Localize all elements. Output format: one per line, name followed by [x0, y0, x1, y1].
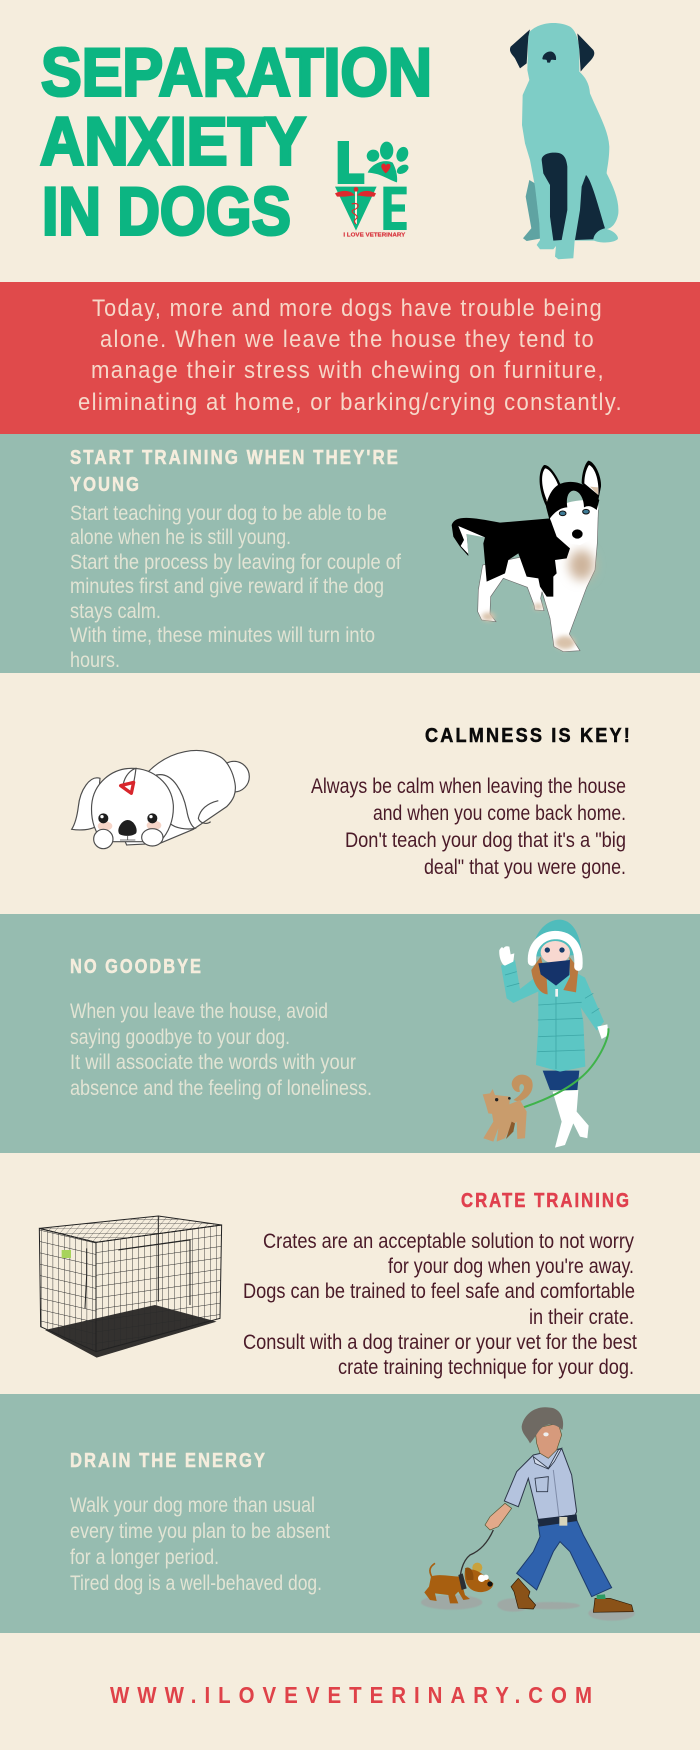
- title: SEPARATION: [41, 34, 432, 110]
- icon: man walking small dog: [421, 1407, 635, 1621]
- heading: crate training: CRATE TRAINING: [461, 1190, 631, 1212]
- icon: woman walking dog: [483, 920, 609, 1148]
- body text: calmness: Always be calm when leaving the house: [311, 775, 626, 798]
- body text: no goodbye: [70, 1000, 372, 1100]
- heading: start training: START TRAINING WHEN THEY'RE: [70, 447, 400, 469]
- body text: drain the energy: [70, 1494, 330, 1595]
- heading: drain the energy: DRAIN THE ENERGY: [70, 1450, 267, 1472]
- intro text: Today, more and more dogs have trouble being: [92, 295, 603, 322]
- heading: start training: [70, 447, 400, 496]
- body text: calmness: Don't teach your dog that it's a "big: [345, 829, 626, 852]
- title: [40, 34, 432, 250]
- intro text: alone. When we leave the house they tend to: [100, 326, 595, 353]
- panel: footer: [0, 1633, 700, 1750]
- logo caption: I LOVE VETERINARY: [343, 232, 406, 238]
- body text: calmness: deal" that you were gone.: [424, 856, 626, 879]
- intro text: manage their stress with chewing on furniture,: [91, 357, 605, 384]
- body text: drain the energy: for a longer period.: [70, 1546, 219, 1569]
- body text: crate training: Dogs can be trained to feel safe and comfortable: [243, 1280, 635, 1303]
- body text: start training: hours.: [70, 649, 120, 672]
- heading: start training: YOUNG: [70, 474, 141, 496]
- body text: drain the energy: Tired dog is a well-behaved dog.: [70, 1572, 322, 1595]
- body text: drain the energy: Walk your dog more than usual: [70, 1494, 315, 1517]
- body text: crate training: for your dog when you're away.: [388, 1255, 634, 1278]
- icon: husky puppy: [452, 461, 601, 652]
- panel: intro banner: [0, 282, 700, 434]
- body text: calmness: [311, 775, 626, 879]
- body text: start training: Start teaching your dog to be able to be: [70, 502, 387, 525]
- body text: calmness: and when you come back home.: [373, 802, 626, 825]
- body text: no goodbye: It will associate the words with your: [70, 1051, 356, 1074]
- body text: start training: With time, these minutes will turn into: [70, 624, 375, 647]
- website url: WWW.ILOVEVETERINARY.COM: [110, 1682, 600, 1708]
- icon: sleeping white dog: [72, 751, 249, 849]
- intro text: eliminating at home, or barking/crying constantly.: [78, 389, 623, 416]
- logo: I Love Veterinary: [335, 141, 410, 238]
- body text: no goodbye: When you leave the house, avoid: [70, 1000, 328, 1023]
- body text: no goodbye: saying goodbye to your dog.: [70, 1026, 290, 1049]
- panel: start training: [0, 434, 700, 673]
- intro text: [78, 295, 623, 416]
- body text: drain the energy: every time you plan to be absent: [70, 1520, 330, 1543]
- heading: no goodbye: NO GOODBYE: [70, 956, 203, 978]
- panel: crate training: [0, 1153, 700, 1394]
- panel: calmness is key: [0, 673, 700, 914]
- body text: start training: Start the process by leaving for couple of: [70, 551, 401, 574]
- body text: start training: stays calm.: [70, 600, 161, 623]
- body text: crate training: Consult with a dog trainer or your vet for the best: [243, 1331, 637, 1354]
- panel: header: [0, 0, 700, 282]
- body text: start training: [70, 502, 401, 672]
- body text: crate training: [243, 1230, 637, 1379]
- panel: drain the energy: [0, 1394, 700, 1633]
- heading: calmness: CALMNESS IS KEY!: [425, 725, 632, 747]
- body text: crate training: crate training technique for your dog.: [338, 1356, 634, 1379]
- body text: crate training: Crates are an acceptable solution to not worry: [263, 1230, 634, 1253]
- icon: wire dog crate: [39, 1216, 222, 1358]
- body text: crate training: in their crate.: [529, 1306, 634, 1329]
- title: ANXIETY: [40, 104, 306, 180]
- icon: sitting dog silhouette: [510, 23, 618, 259]
- body text: start training: alone when he is still young.: [70, 526, 291, 549]
- body text: no goodbye: absence and the feeling of loneliness.: [70, 1077, 372, 1100]
- title: IN DOGS: [42, 174, 291, 250]
- panel: no goodbye: [0, 914, 700, 1153]
- body text: start training: minutes first and give reward if the dog: [70, 575, 384, 598]
